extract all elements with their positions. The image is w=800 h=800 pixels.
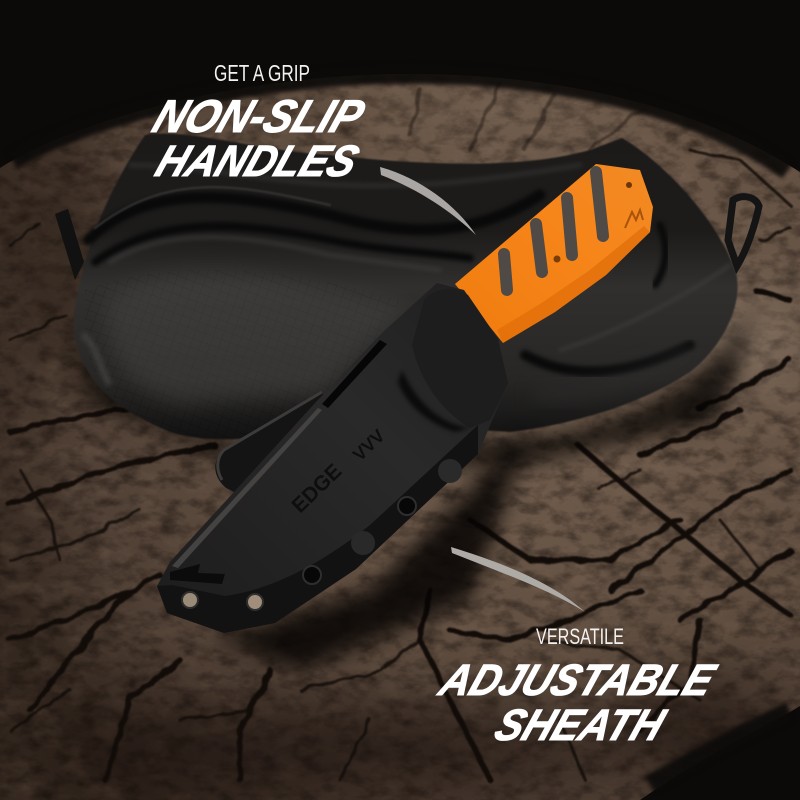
pouch ripstop weave <box>85 270 400 439</box>
sheath slot <box>322 340 387 408</box>
handle lower shade <box>497 226 650 343</box>
heading label: get a grip: GET A GRIP <box>214 60 310 86</box>
sheath bump shadow <box>398 370 470 432</box>
heading: non-slip: NON-SLIP <box>146 91 371 143</box>
handle holes <box>554 256 560 262</box>
knife handle <box>455 164 653 343</box>
sheath edge highlight <box>172 408 322 568</box>
belt clip behind sheath <box>215 392 335 500</box>
pouch lit panel <box>105 271 410 405</box>
black ripstop pouch <box>74 134 738 439</box>
sheath <box>157 283 508 633</box>
sheath tip notch <box>170 564 225 584</box>
sheath brand mark: VVV <box>349 425 389 465</box>
handle logo mark <box>625 210 643 228</box>
pouch zipper and folds <box>88 165 730 395</box>
bag shadow <box>70 290 760 465</box>
knife shadow on wood <box>215 430 530 670</box>
arrow: sheath pointer <box>451 547 585 612</box>
right pouch pull tab <box>728 197 759 266</box>
sheath screws and eyelets <box>182 459 462 610</box>
heading: sheath: SHEATH <box>488 700 673 750</box>
sheath raised bump <box>412 289 508 428</box>
heading label: versatile: VERSATILE <box>536 624 624 649</box>
handle grip slots <box>504 172 603 290</box>
pouch left fold highlight <box>82 335 110 385</box>
left pouch pull tab <box>55 209 84 280</box>
sheath outer strap <box>157 425 478 633</box>
heading: adjustable: ADJUSTABLE <box>433 655 723 705</box>
sheath brand text: EDGE <box>287 460 346 518</box>
heading: handles: HANDLES <box>149 136 365 186</box>
arrow: handle pointer <box>380 167 476 235</box>
